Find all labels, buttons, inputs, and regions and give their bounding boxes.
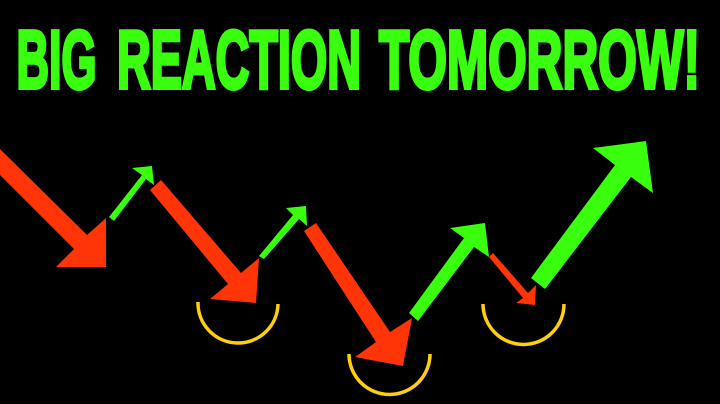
arrow 2: small green up — [109, 166, 154, 221]
arrow 1: large red down — [0, 149, 106, 267]
arrow 5: red down — [304, 223, 412, 366]
arrow 8: large green up — [531, 141, 653, 289]
title: BIG — [16, 13, 96, 106]
arrow 3: red down — [150, 180, 259, 303]
arrow 4: small green up — [259, 206, 307, 259]
title: REACTION — [117, 13, 361, 106]
arc: yellow support 2 — [349, 354, 430, 394]
arrow 6: green up — [409, 223, 489, 321]
arc: yellow support 1 — [198, 302, 278, 343]
title — [16, 13, 700, 106]
arrow 7: small red down — [489, 253, 536, 305]
arc: yellow support 3 — [483, 304, 564, 344]
